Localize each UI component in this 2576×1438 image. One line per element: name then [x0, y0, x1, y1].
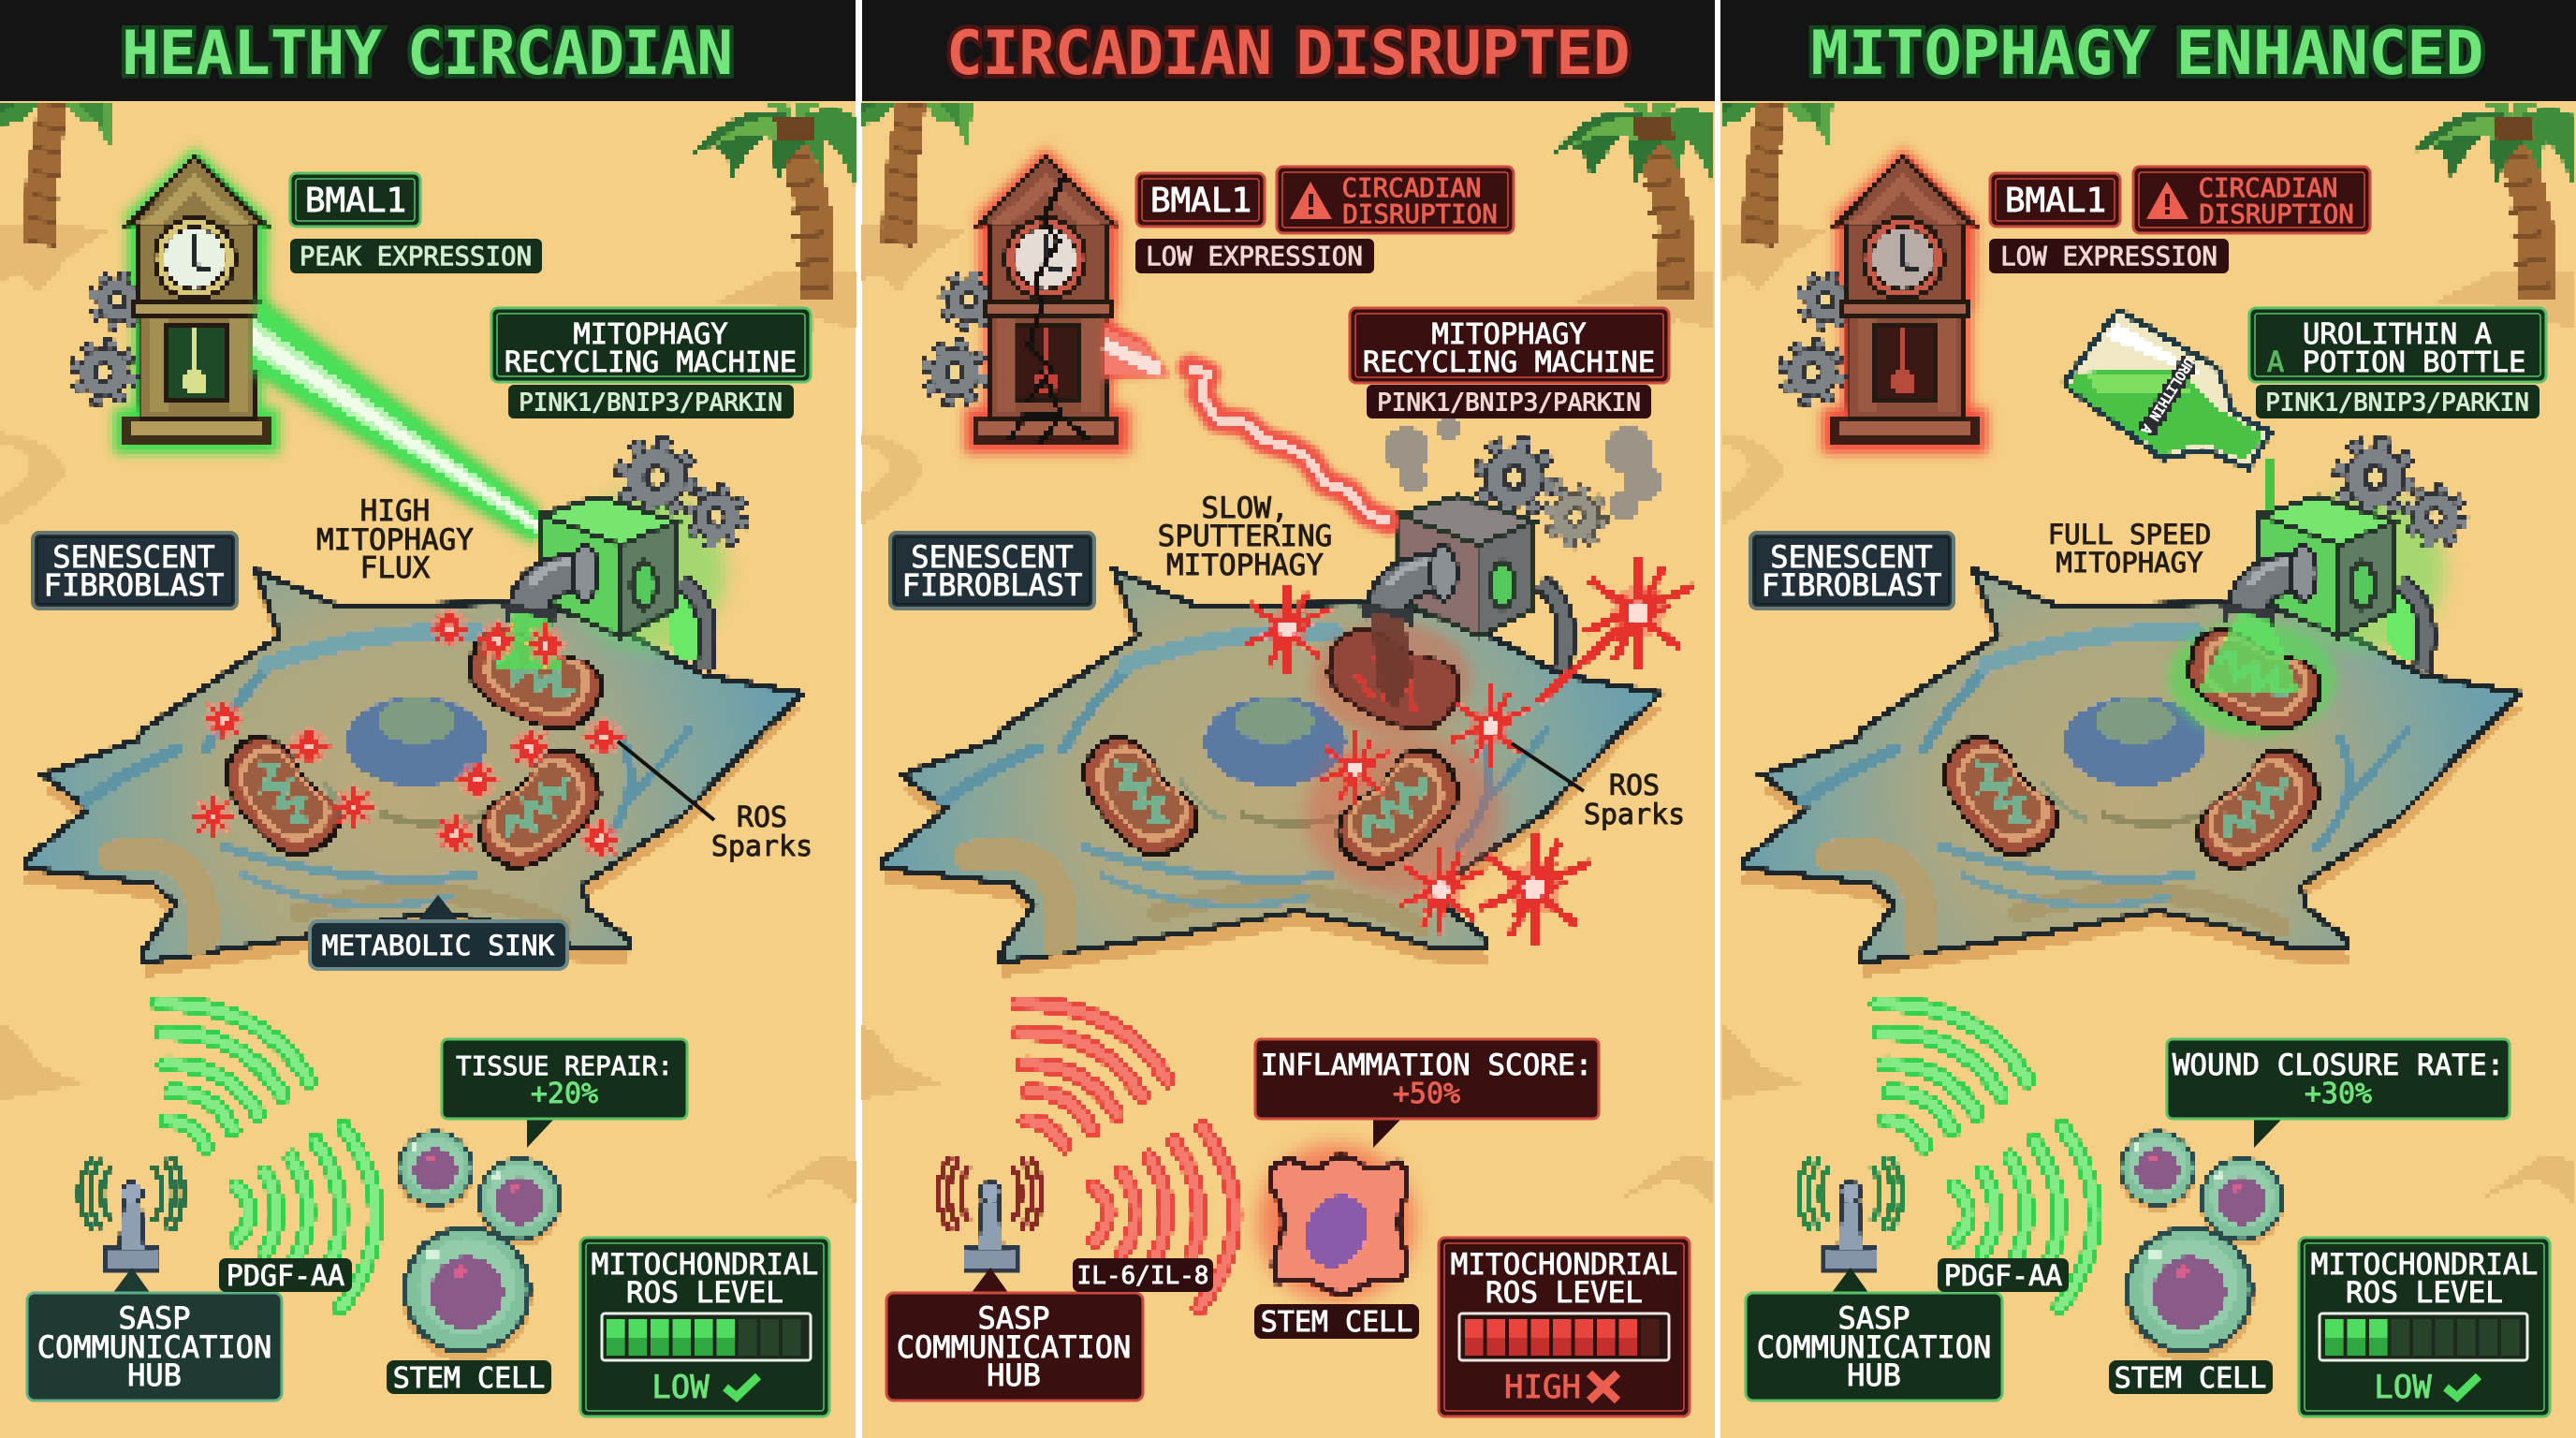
icon: gears on machine: [622, 444, 743, 543]
label: senescent fibroblast: FIBROBLAST: [44, 567, 224, 603]
label: SASP communication hub: COMMUNICATION: [897, 1329, 1131, 1365]
mitochondrion right: [1320, 735, 1479, 889]
label: senescent fibroblast: [890, 533, 1094, 609]
stream: green flux: [496, 613, 562, 669]
text: high mitophagy flux: HIGH: [360, 494, 430, 528]
mitochondrion right: [461, 735, 621, 889]
label: BMAL1: [1990, 173, 2120, 227]
gauge: ROS level high: [1439, 1238, 1690, 1416]
artwork layer: [0, 95, 856, 1362]
mitochondrion under machine: [452, 614, 614, 747]
gauge: ROS level high: HIGH: [1504, 1369, 1581, 1406]
alert: circadian disruption: CIRCADIAN: [2198, 173, 2338, 203]
text: high mitophagy flux: [316, 494, 474, 585]
alert: circadian disruption: [2133, 167, 2370, 233]
callout: ROS sparks: ROS: [737, 801, 787, 834]
title bar: CIRCADIAN: [407, 19, 733, 89]
alert: circadian disruption: CIRCADIAN: [1341, 173, 1482, 203]
label: SASP communication hub: SASP: [977, 1300, 1050, 1336]
label: stem cell: STEM CELL: [2115, 1362, 2266, 1395]
artwork layer: [1719, 95, 2574, 1362]
icon: healthy clock: [76, 148, 279, 453]
machine glow: [566, 492, 725, 660]
callout: wound closure rate: WOUND CLOSURE RATE:: [2173, 1049, 2504, 1082]
cell: senescent fibroblast: [883, 570, 1661, 977]
label: BMAL1: [1136, 173, 1265, 227]
mitochondrion left: [205, 720, 353, 874]
label: senescent fibroblast: SENESCENT: [52, 539, 215, 575]
label: SASP communication hub: HUB: [1847, 1357, 1901, 1393]
label: SASP communication hub: [886, 1268, 1143, 1401]
title bar: [1720, 0, 2576, 101]
label: senescent fibroblast: FIBROBLAST: [1762, 567, 1941, 603]
panel background: [0, 0, 856, 1438]
callout: inflammation score: INFLAMMATION SCORE:: [1261, 1049, 1592, 1082]
palm trees and dunes: [1719, 95, 2574, 1204]
label: IL-6/IL-8: IL-6/IL-8: [1077, 1262, 1208, 1290]
cell: senescent fibroblast: [1743, 570, 2521, 977]
label: stem cell: STEM CELL: [1261, 1306, 1412, 1339]
signal arcs up: [159, 1004, 309, 1146]
signal arcs right: [1954, 1127, 2095, 1308]
label: BMAL1: BMAL1: [305, 182, 406, 220]
gauge: ROS level low: ROS LEVEL: [626, 1276, 783, 1310]
signal arcs up: [1878, 1004, 2027, 1146]
label: urolithin A potion bottle: POTION BOTTLE: [2303, 346, 2525, 379]
title bar: MITOPHAGY: [1810, 19, 2151, 89]
gauge: ROS level low: MITOCHONDRIAL: [592, 1248, 818, 1282]
red glow: [1306, 735, 1502, 894]
icon: recycling machine: [2220, 496, 2426, 670]
gauge: ROS level low: LOW: [2374, 1369, 2432, 1406]
gauge: ROS level low: ROS LEVEL: [2346, 1276, 2503, 1310]
label: pathway genes: PINK1/BNIP3/PARKIN: [519, 389, 783, 418]
machine glow: [2285, 492, 2444, 660]
text: slow sputtering mitophagy: MITOPHAGY: [1166, 549, 1324, 582]
label: mitophagy recycling machine: RECYCLING MACHINE: [505, 346, 797, 379]
icon: gears on machine: [1481, 444, 1602, 543]
text: slow sputtering mitophagy: SLOW,: [1201, 492, 1289, 525]
label: senescent fibroblast: [33, 533, 237, 609]
title bar: HEALTHY: [122, 19, 382, 89]
liquid glow: [2168, 621, 2336, 737]
callout: inflammation score: +50%: [1393, 1078, 1460, 1110]
label: SASP communication hub: HUB: [127, 1357, 182, 1393]
alert: circadian disruption: [1277, 167, 1514, 233]
callout: wound closure rate: [2167, 1039, 2510, 1148]
label: peak expression: PEAK EXPRESSION: [300, 242, 532, 271]
label: senescent fibroblast: FIBROBLAST: [902, 567, 1082, 603]
ROS sparks big: [1245, 556, 1694, 945]
title bar: [0, 0, 856, 101]
title bar: CIRCADIAN: [946, 19, 1272, 89]
title bar: DISRUPTED: [1295, 19, 1631, 89]
gauge: ROS level low: LOW: [651, 1369, 710, 1406]
label: BMAL1: [290, 173, 420, 227]
icon: red clock: [1784, 148, 1987, 453]
mitochondrion right: [2180, 735, 2339, 889]
callout: ROS sparks: Sparks: [711, 830, 812, 863]
callout: wound closure rate: +30%: [2305, 1078, 2372, 1110]
palm trees and dunes: [858, 95, 1714, 1204]
label: BMAL1: BMAL1: [2005, 182, 2106, 220]
panel: mitophagy enhanced: [1719, 0, 2576, 1438]
label: mitophagy recycling machine: [1350, 308, 1669, 383]
callout: tissue repair: TISSUE REPAIR:: [456, 1051, 673, 1081]
label: SASP communication hub: [1746, 1268, 2002, 1401]
text: full speed mitophagy: FULL SPEED: [2048, 519, 2211, 550]
text: slow sputtering mitophagy: SPUTTERING: [1158, 520, 1332, 553]
label: mitophagy recycling machine: MITOPHAGY: [1431, 318, 1587, 351]
label: mitophagy recycling machine: RECYCLING MACHINE: [1363, 346, 1655, 379]
signal arcs right: [1094, 1127, 1235, 1308]
label: PDGF-AA: PDGF-AA: [227, 1260, 344, 1293]
mitochondrion left: [1063, 720, 1211, 874]
title bar: [862, 0, 1715, 101]
gauge: ROS level low: [580, 1238, 829, 1416]
label: senescent fibroblast: SENESCENT: [1770, 539, 1933, 575]
label: BMAL1: BMAL1: [1150, 182, 1251, 220]
mitochondrion under machine: [2171, 614, 2333, 747]
icon: gears on machine: [2341, 444, 2462, 543]
label: low expression: LOW EXPRESSION: [2000, 242, 2217, 271]
label: stem cell: STEM CELL: [393, 1362, 545, 1395]
label: pathway genes: PINK1/BNIP3/PARKIN: [2265, 389, 2529, 418]
icon: stem cells: [397, 1130, 562, 1362]
smoke: [1384, 418, 1661, 521]
label: SASP communication hub: HUB: [987, 1357, 1041, 1393]
label: metabolic sink: [310, 895, 567, 969]
text: high mitophagy flux: MITOPHAGY: [316, 523, 474, 557]
icon: cracked clock: [927, 148, 1130, 453]
callout: ROS sparks: [618, 741, 812, 863]
label: mitophagy recycling machine: MITOPHAGY: [573, 318, 728, 351]
signal arcs up: [1017, 1004, 1167, 1146]
label: SASP communication hub: COMMUNICATION: [1757, 1329, 1991, 1365]
callout: ROS sparks: ROS: [1609, 770, 1660, 802]
callout: ROS sparks: [1512, 743, 1685, 831]
beam: green signal: [253, 296, 538, 545]
gauge: ROS level low: MITOCHONDRIAL: [2311, 1248, 2538, 1282]
alert: circadian disruption: DISRUPTION: [1342, 199, 1498, 229]
stream: sputtering drip: [1371, 613, 1413, 712]
panel: healthy circadian: [0, 0, 856, 1438]
gauge: ROS level high: MITOCHONDRIAL: [1451, 1248, 1677, 1282]
text: slow sputtering mitophagy: [1158, 492, 1332, 582]
cell: senescent fibroblast: [24, 570, 802, 977]
label: urolithin A potion bottle: UROLITHIN A: [2303, 318, 2492, 351]
bottle label text: UROLITHIN A: [2137, 355, 2197, 437]
icon: inflamed stem cell: [1258, 1144, 1415, 1301]
callout: inflammation score: [1255, 1039, 1599, 1148]
text: full speed mitophagy: MITOPHAGY: [2056, 547, 2203, 579]
icon: recycling machine: [502, 496, 708, 670]
mitochondrion damaged: [1310, 614, 1472, 747]
panel: circadian disrupted: [858, 0, 1715, 1438]
label: SASP communication hub: SASP: [118, 1300, 191, 1336]
artwork layer: [858, 95, 1714, 1308]
icon: antenna: [1798, 1157, 1902, 1269]
gauge: ROS level high: ROS LEVEL: [1486, 1276, 1643, 1310]
panel background: [1720, 0, 2576, 1438]
gauge: ROS level low: [2299, 1238, 2550, 1416]
ROS sparks: [190, 605, 627, 862]
label: urolithin A potion bottle: A: [2267, 346, 2284, 379]
callout: tissue repair: +20%: [531, 1078, 598, 1110]
text: high mitophagy flux: FLUX: [360, 551, 431, 585]
icon: antenna: [80, 1157, 183, 1269]
label: low expression: LOW EXPRESSION: [1146, 242, 1363, 271]
icon: stem cells: [2119, 1130, 2284, 1362]
callout: ROS sparks: Sparks: [1584, 799, 1685, 831]
label: mitophagy recycling machine: [491, 308, 811, 382]
palm trees and dunes: [0, 95, 856, 1204]
label: PDGF-AA: PDGF-AA: [1944, 1260, 2062, 1293]
icon: potion bottle: [2064, 310, 2270, 512]
label: SASP communication hub: COMMUNICATION: [37, 1329, 271, 1365]
stream: green flux: [2196, 613, 2301, 695]
panel background: [862, 0, 1715, 1438]
beam: broken signal: [1103, 318, 1388, 521]
icon: antenna: [938, 1157, 1042, 1269]
label: pathway genes: PINK1/BNIP3/PARKIN: [1377, 389, 1641, 418]
icon: broken machine: [1360, 496, 1566, 670]
label: senescent fibroblast: [1750, 533, 1954, 609]
alert: circadian disruption: DISRUPTION: [2199, 199, 2354, 229]
label: SASP communication hub: [27, 1268, 282, 1401]
label: senescent fibroblast: SENESCENT: [911, 539, 1074, 575]
text: full speed mitophagy: [2048, 519, 2211, 579]
label: SASP communication hub: SASP: [1837, 1300, 1910, 1336]
signal arcs right: [236, 1127, 376, 1308]
title bar: ENHANCED: [2175, 19, 2484, 89]
label: metabolic sink: METABOLIC SINK: [322, 930, 555, 961]
callout: tissue repair: [442, 1039, 687, 1148]
mitochondrion left: [1924, 720, 2071, 874]
label: urolithin A potion bottle: [2249, 308, 2546, 382]
